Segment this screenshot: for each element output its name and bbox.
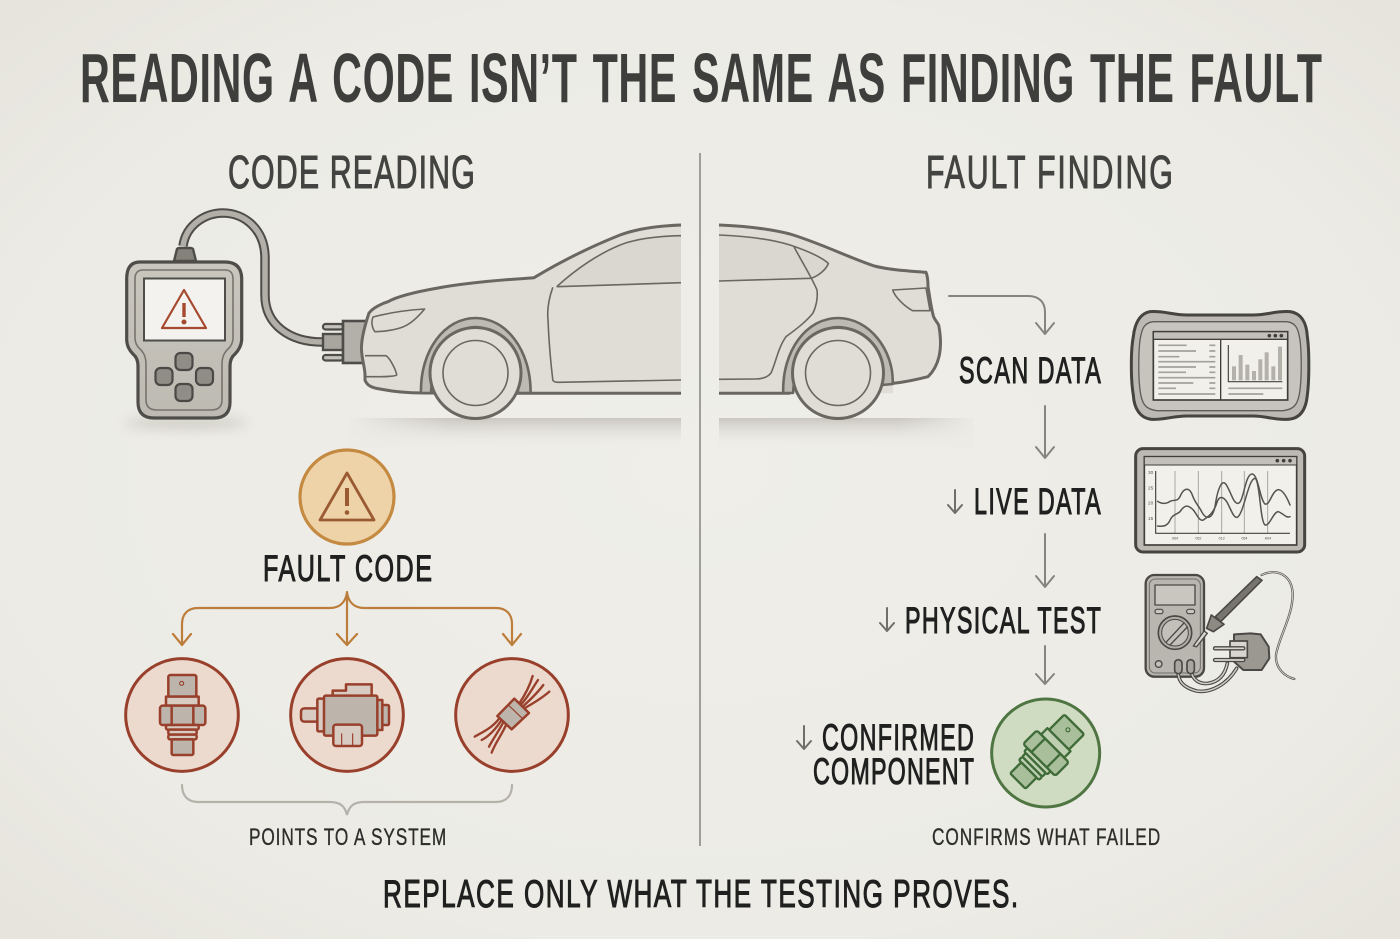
- car shadow right: [719, 418, 974, 448]
- arrow: scan to live: [1036, 406, 1054, 458]
- chart: live data monitor: 20: [1148, 500, 1154, 505]
- heading: code reading: CODE READING: [228, 148, 475, 199]
- bottom message: REPLACE ONLY WHAT THE TESTING PROVES.: [383, 873, 1018, 916]
- chart: live data monitor: 064: [1172, 536, 1178, 540]
- label: confirmed component: COMPONENT: [813, 750, 974, 792]
- icon: multimeter with probe: [1146, 572, 1294, 691]
- chart: live data monitor: 30: [1148, 470, 1154, 475]
- cable and OBD plug: [174, 213, 369, 363]
- circle: sensor: [126, 659, 238, 771]
- circle: control module: [291, 659, 403, 771]
- icon: fault code warning badge: [300, 450, 394, 544]
- caption: confirms what failed: CONFIRMS WHAT FAILED: [932, 824, 1160, 851]
- label: scan data: SCAN DATA: [959, 349, 1101, 391]
- arrow: physical to confirmed: [1036, 646, 1054, 684]
- caption: points to a system: POINTS TO A SYSTEM: [249, 824, 446, 851]
- label: confirmed component: CONFIRMED: [822, 716, 974, 758]
- heading: fault finding: FAULT FINDING: [926, 148, 1173, 199]
- arrow: live to physical: [1036, 534, 1054, 587]
- brace: [182, 785, 512, 815]
- chart: live data monitor: A04: [1265, 536, 1271, 540]
- branching arrows: [173, 592, 521, 645]
- chart: live data monitor: 25: [1148, 485, 1154, 490]
- icon: scan tool: [127, 262, 242, 418]
- keypad: [156, 353, 213, 401]
- label: live data: LIVE DATA: [974, 480, 1101, 522]
- circle: confirmed component: [992, 699, 1100, 807]
- chart: live data monitor: [1136, 449, 1305, 552]
- label: confirmed component: [797, 716, 974, 792]
- chart: live data monitor: 052: [1195, 536, 1201, 540]
- chart: live data monitor: 012: [1219, 536, 1225, 540]
- circle: wiring harness: [456, 659, 568, 771]
- title: READING A CODE ISN’T THE SAME AS FINDING THE FAULT: [80, 40, 1322, 118]
- car shadow left: [350, 418, 681, 448]
- icon: warning on screen: [162, 290, 206, 328]
- label: fault code: FAULT CODE: [263, 547, 432, 589]
- icon: scan tablet: [1131, 312, 1309, 419]
- car front half: [361, 225, 681, 418]
- label: physical test: PHYSICAL TEST: [905, 599, 1101, 641]
- centre divider: [699, 153, 701, 846]
- arrow: from car to scan data: [949, 296, 1054, 334]
- chart: live data monitor: 15: [1148, 516, 1154, 521]
- scan tool shadow: [124, 417, 248, 429]
- car rear half: [719, 225, 940, 418]
- chart: live data monitor: 054: [1241, 536, 1247, 540]
